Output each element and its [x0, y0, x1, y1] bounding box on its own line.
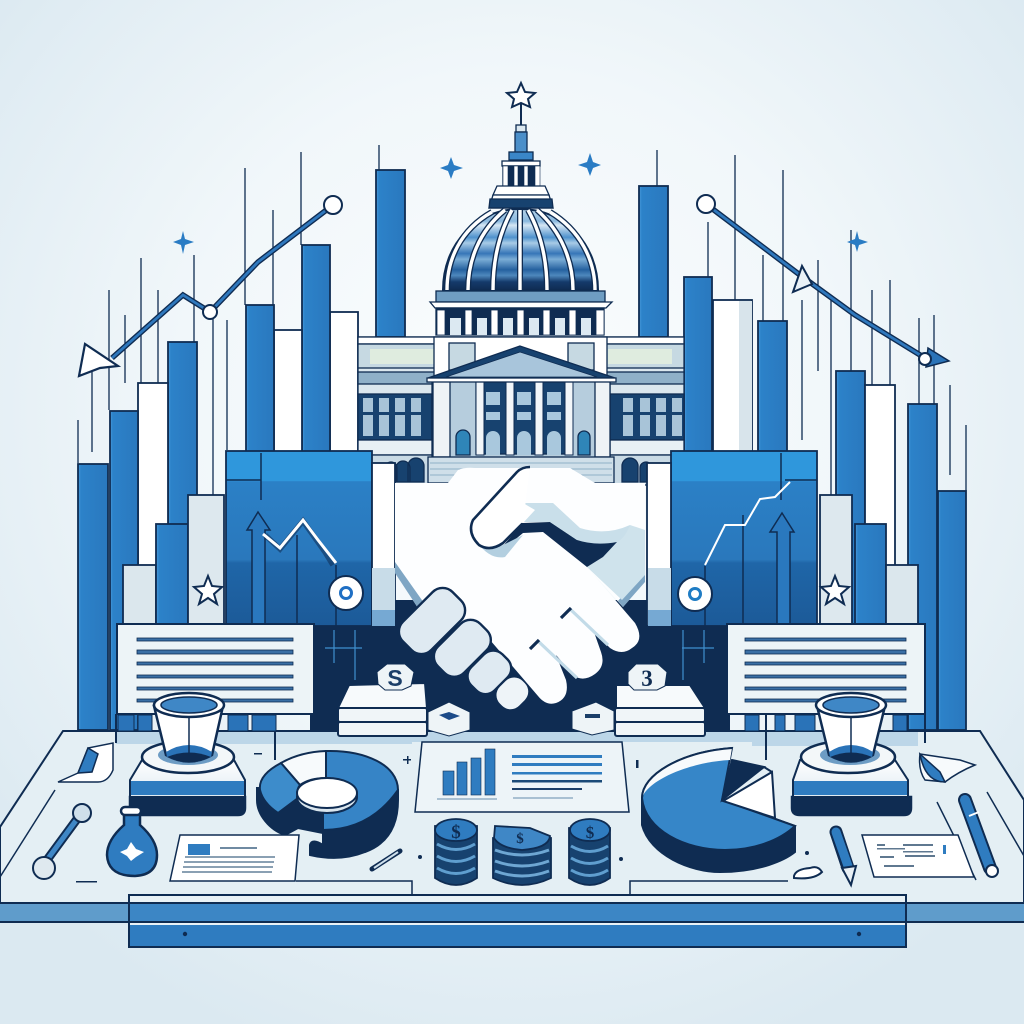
- dark gap under thumb: [500, 522, 617, 567]
- dark backdrop: [310, 600, 730, 731]
- handshake: [393, 467, 645, 714]
- cuffs and palm silhouette: [395, 468, 645, 704]
- right panel node: [678, 577, 712, 611]
- wrench tool: [33, 804, 91, 879]
- right cup on stand: [792, 693, 911, 815]
- left panel: [226, 451, 395, 626]
- left bar chart: [78, 145, 405, 730]
- coin stack right: [569, 819, 610, 885]
- left table note scrap: [58, 743, 113, 782]
- right paper card: [862, 835, 974, 877]
- sparkle stars: [173, 153, 868, 254]
- donut pie chart: [257, 751, 398, 858]
- coin stack right: $: [586, 823, 595, 842]
- coin stack middle: [493, 826, 551, 885]
- cuff lower edges: [395, 562, 645, 608]
- right small clip: [794, 867, 822, 878]
- right bar chart: [639, 150, 966, 730]
- left star badge: [194, 576, 222, 604]
- dome finial star: [507, 83, 535, 160]
- left trend arrow: [79, 196, 342, 376]
- finger separations: [530, 608, 608, 678]
- coin stack left: $: [451, 822, 461, 843]
- left money stack: [338, 664, 427, 736]
- capitol building: [358, 83, 684, 485]
- coin stack middle: $: [516, 831, 524, 847]
- table front: [0, 881, 1024, 947]
- left panel up arrow: [247, 512, 270, 626]
- left panel node: [329, 576, 363, 610]
- grid crosses on dark backdrop: [325, 630, 714, 680]
- pen far right: [965, 800, 998, 877]
- right star badge: [821, 576, 849, 604]
- right small packet: [572, 702, 614, 735]
- portico pediment: [427, 346, 616, 382]
- right money stack: [615, 664, 705, 736]
- left small packet: [428, 702, 470, 736]
- thumb: [471, 467, 530, 548]
- right money stack: 3: [641, 666, 653, 691]
- left small pen: [372, 851, 400, 869]
- central block: [428, 337, 614, 483]
- wings: [358, 337, 684, 485]
- dome lantern: [489, 161, 553, 208]
- pale thumb underside: [523, 503, 630, 544]
- left money stack: S: [387, 665, 403, 691]
- left panel zigzag: [265, 521, 333, 565]
- right panel: [647, 451, 817, 626]
- drum colonnade: [430, 291, 612, 335]
- pale right cuff: [587, 525, 645, 600]
- coin stack left: [435, 819, 477, 885]
- right trend arrow: [697, 195, 949, 367]
- pie chart: [642, 748, 795, 872]
- left cup on stand: [130, 693, 245, 815]
- right notice board: [727, 624, 925, 760]
- dome: [443, 209, 598, 290]
- left notice board: [116, 624, 314, 760]
- centre report with bar chart: [415, 742, 629, 812]
- left paper card: [170, 835, 299, 881]
- thumb shadow: [477, 535, 523, 557]
- left hand fingers: [393, 582, 533, 714]
- right table note scrap: [920, 754, 975, 782]
- table top: [0, 731, 1024, 903]
- right panel up arrow: [770, 513, 794, 626]
- right panel rising line: [705, 482, 790, 565]
- pen centre right: [836, 832, 856, 885]
- flask: [107, 807, 157, 876]
- small table marks: [76, 753, 809, 882]
